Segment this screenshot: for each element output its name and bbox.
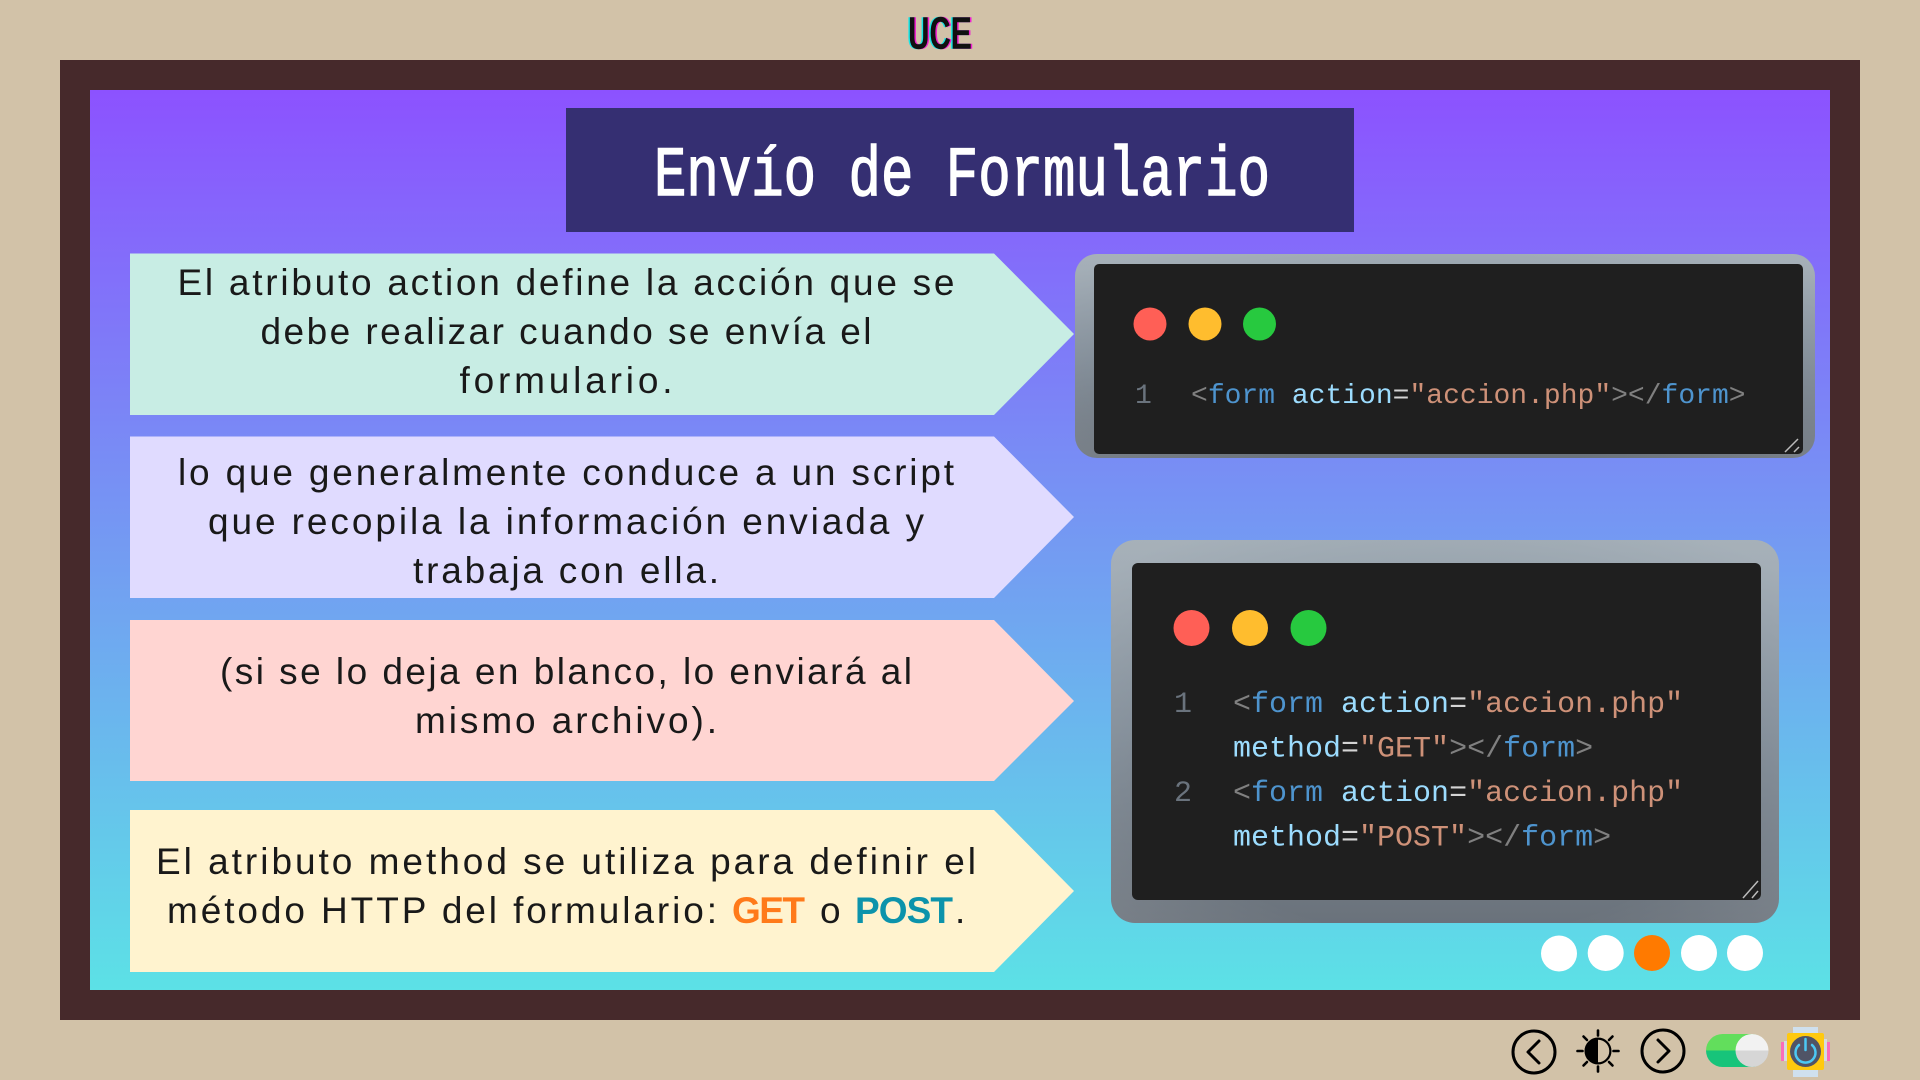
- icon: toggle switch: [1706, 1034, 1768, 1067]
- arrow panel: method: [130, 810, 1074, 972]
- code lines: method="POST"></form>: [1233, 822, 1611, 856]
- arrow panel: script: [130, 436, 1074, 598]
- code lines: <form action="accion.php": [1233, 777, 1683, 811]
- code line: <form action="accion.php"></form>: [1191, 381, 1746, 412]
- action text: debe realizar cuando se envía el: [260, 311, 872, 352]
- icon: next: [1642, 1030, 1684, 1072]
- code window: action example: [1075, 254, 1815, 458]
- script text: que recopila la información enviada y: [208, 501, 924, 542]
- brand label UCE: UCE: [906, 11, 970, 62]
- method text: método HTTP del formulario:: [167, 890, 717, 931]
- code window: method example: [1111, 540, 1779, 923]
- blank action text: (si se lo deja en blanco, lo enviará al: [220, 651, 912, 692]
- code line: 1: [1135, 381, 1152, 412]
- brand label UCE: UCE: [910, 11, 974, 62]
- title text: Envío de Formulario: [654, 137, 1270, 216]
- window buttons: [1174, 610, 1326, 646]
- method text: El atributo method se utiliza para definir el: [156, 841, 976, 882]
- action text: [178, 262, 954, 401]
- window buttons: [1134, 308, 1276, 340]
- method text: POST: [855, 890, 953, 931]
- script text: [178, 452, 955, 591]
- action text: formulario.: [460, 360, 672, 401]
- method text: .: [955, 890, 965, 931]
- blank action text: [220, 651, 912, 741]
- action text: El atributo action define la acción que se: [178, 262, 954, 303]
- script text: trabaja con ella.: [413, 550, 719, 591]
- icon: brightness: [1578, 1030, 1618, 1072]
- code lines: 1: [1174, 688, 1192, 722]
- title banner: [566, 108, 1354, 232]
- method text: GET: [732, 890, 805, 931]
- brand label UCE: UCE: [908, 11, 972, 62]
- script text: lo que generalmente conduce a un script: [178, 452, 955, 493]
- pagination dots: [1541, 935, 1763, 972]
- arrow panel: blank action: [130, 620, 1074, 781]
- method text: [156, 841, 976, 931]
- blank action text: mismo archivo).: [415, 700, 717, 741]
- arrow panel: action: [130, 254, 1074, 415]
- method text: o: [820, 890, 841, 931]
- code lines: <form action="accion.php": [1233, 688, 1683, 722]
- icon: power watch: [1781, 1027, 1830, 1077]
- code lines: method="GET"></form>: [1233, 732, 1593, 766]
- code lines: 2: [1174, 777, 1192, 811]
- code lines: [1174, 688, 1683, 856]
- slide gradient panel: [90, 90, 1830, 990]
- icon: previous: [1513, 1031, 1555, 1073]
